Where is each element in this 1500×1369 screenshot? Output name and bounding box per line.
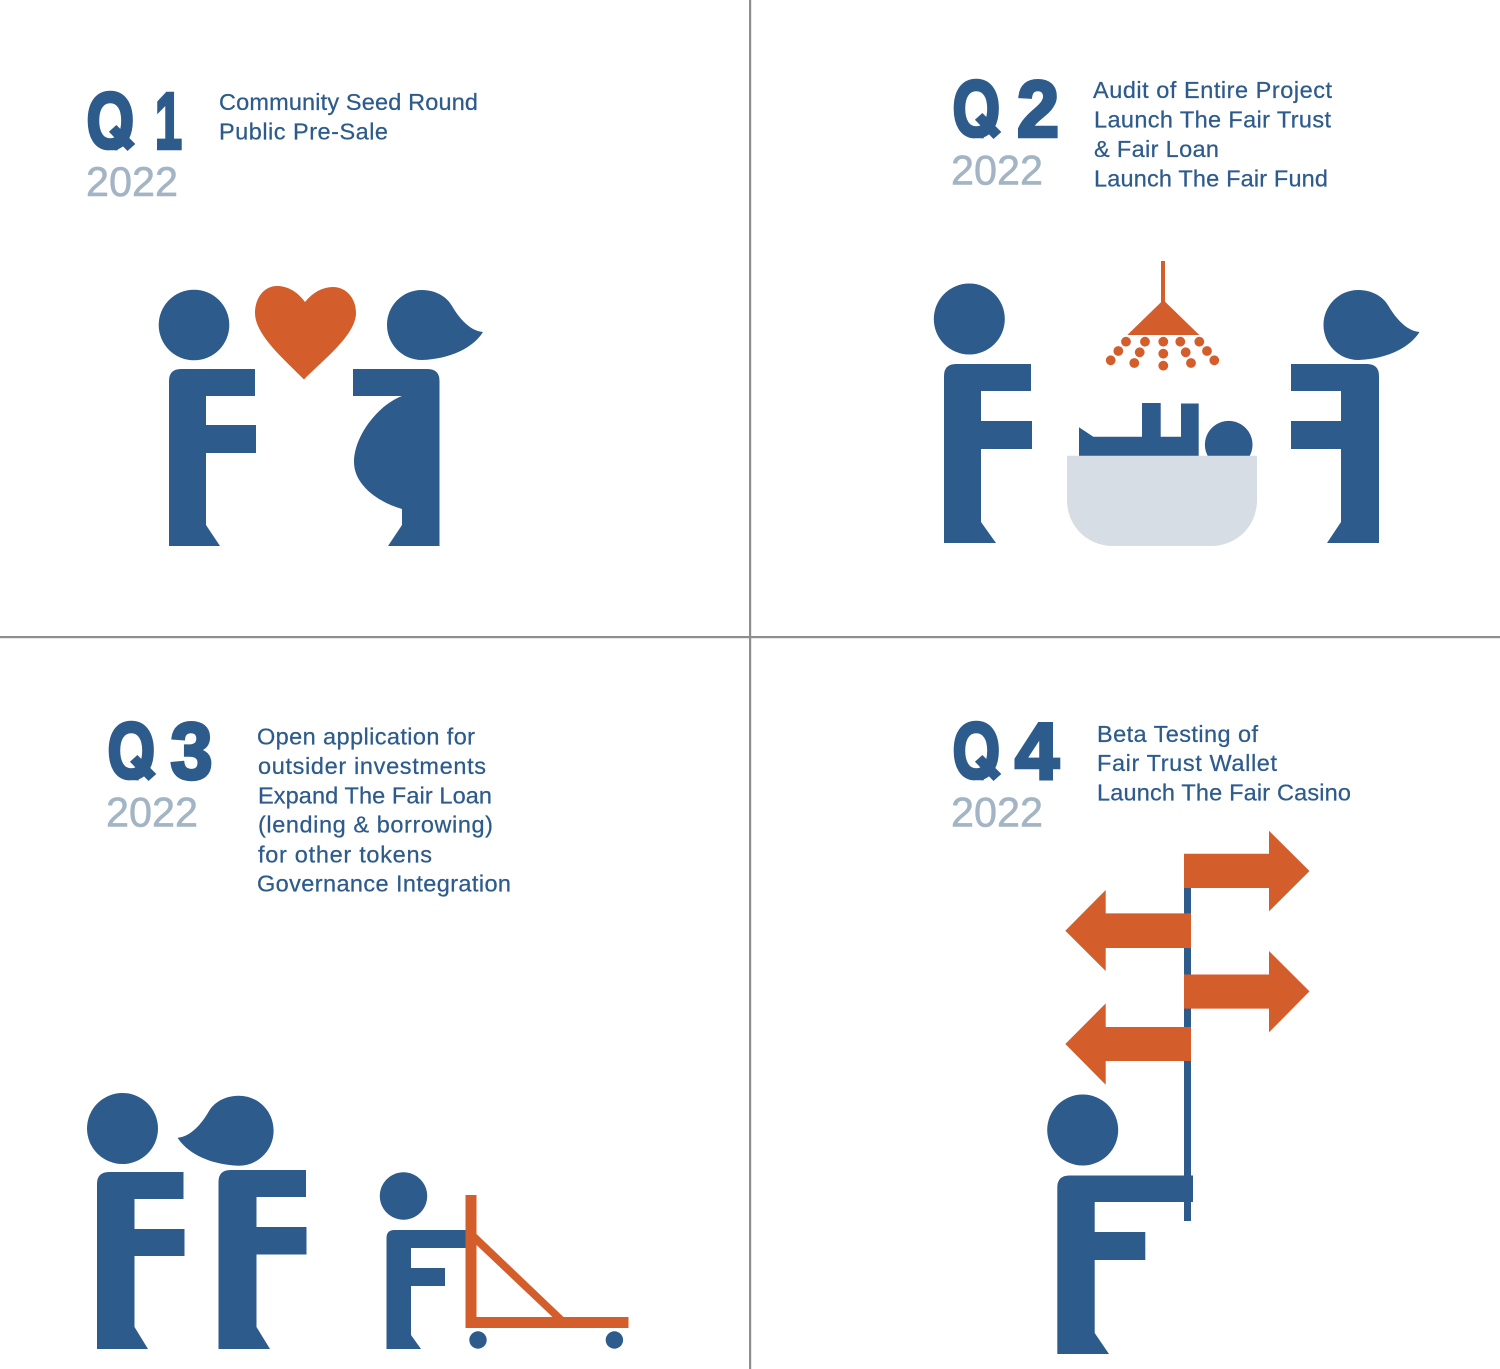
heading: Q4: Q bbox=[952, 706, 1000, 795]
year: 2022: 2022 bbox=[86, 158, 178, 205]
icon: signpost pole bbox=[1184, 855, 1191, 1221]
text block: Q4 milestones: Beta Testing of bbox=[1097, 721, 1258, 747]
text block: Q4 milestones: Fair Trust Wallet bbox=[1097, 750, 1277, 776]
text block: Q3 milestones: Governance Integration bbox=[257, 870, 511, 896]
heading: Q1: Q bbox=[86, 76, 134, 165]
heading: Q2 bbox=[954, 78, 1058, 139]
heading: Q3 bbox=[108, 720, 212, 782]
panel: Q3 2022 bbox=[87, 706, 628, 1349]
text block: Q1 milestones bbox=[219, 89, 478, 144]
text block: Q3 milestones: Open application for bbox=[257, 724, 475, 750]
heading: Q1 bbox=[88, 90, 182, 151]
arrow: left 2 bbox=[1065, 1003, 1191, 1085]
icon: shower head bbox=[1106, 261, 1219, 371]
year: 2022: 2022 bbox=[106, 789, 198, 836]
icon: man holding signpost bbox=[1047, 1094, 1193, 1354]
panel: Q2 2022 bbox=[934, 64, 1420, 546]
text block: Q3 milestones: outsider investments bbox=[258, 753, 486, 779]
year: 2022: 2022 bbox=[951, 146, 1043, 194]
icon: man figure bbox=[87, 1093, 184, 1349]
icon: pregnant woman figure bbox=[353, 290, 483, 546]
icon: baby in bathtub bbox=[1067, 403, 1257, 546]
text block: Q4 milestones: Launch The Fair Casino bbox=[1097, 780, 1351, 806]
text block: Q2 milestones: Audit of Entire Project bbox=[1093, 77, 1332, 103]
icon: man figure bbox=[159, 290, 256, 546]
text block: Q4 milestones bbox=[1097, 721, 1351, 806]
arrow: left 1 bbox=[1065, 890, 1191, 971]
arrow: right 2 bbox=[1184, 951, 1310, 1032]
text block: Q3 milestones bbox=[257, 724, 511, 896]
text block: Q2 milestones: Launch The Fair Fund bbox=[1094, 166, 1328, 192]
panel: Q1 2022 bbox=[86, 76, 483, 546]
text block: Q3 milestones: (lending & borrowing) bbox=[258, 812, 493, 838]
icon: heart bbox=[255, 286, 356, 380]
arrow: right 1 bbox=[1184, 831, 1310, 911]
year: 2022: 2022 bbox=[951, 789, 1043, 836]
heading: Q1: 1 bbox=[155, 76, 182, 165]
text block: Q1 milestones: Community Seed Round bbox=[219, 89, 478, 115]
text block: Q3 milestones: Expand The Fair Loan bbox=[258, 782, 492, 808]
text block: Q2 milestones: Launch The Fair Trust bbox=[1094, 106, 1331, 132]
text block: Q2 milestones bbox=[1093, 77, 1332, 192]
heading: Q4: 4 bbox=[1015, 706, 1059, 795]
heading: Q2: Q bbox=[952, 64, 1000, 153]
icon: woman figure bbox=[1291, 290, 1420, 543]
heading: Q3: 3 bbox=[170, 706, 212, 795]
heading: Q3: Q bbox=[108, 706, 155, 795]
text block: Q2 milestones: & Fair Loan bbox=[1094, 136, 1219, 162]
icon: woman figure bbox=[178, 1096, 306, 1349]
heading: Q4 bbox=[954, 720, 1060, 781]
icon: man figure bbox=[934, 284, 1032, 543]
text block: Q3 milestones: for other tokens bbox=[258, 842, 432, 868]
text block: Q1 milestones: Public Pre-Sale bbox=[219, 118, 388, 144]
icon: child pushing cart bbox=[380, 1172, 628, 1349]
panel: Q4 2022 bbox=[951, 706, 1351, 1354]
heading: Q2: 2 bbox=[1017, 64, 1059, 153]
